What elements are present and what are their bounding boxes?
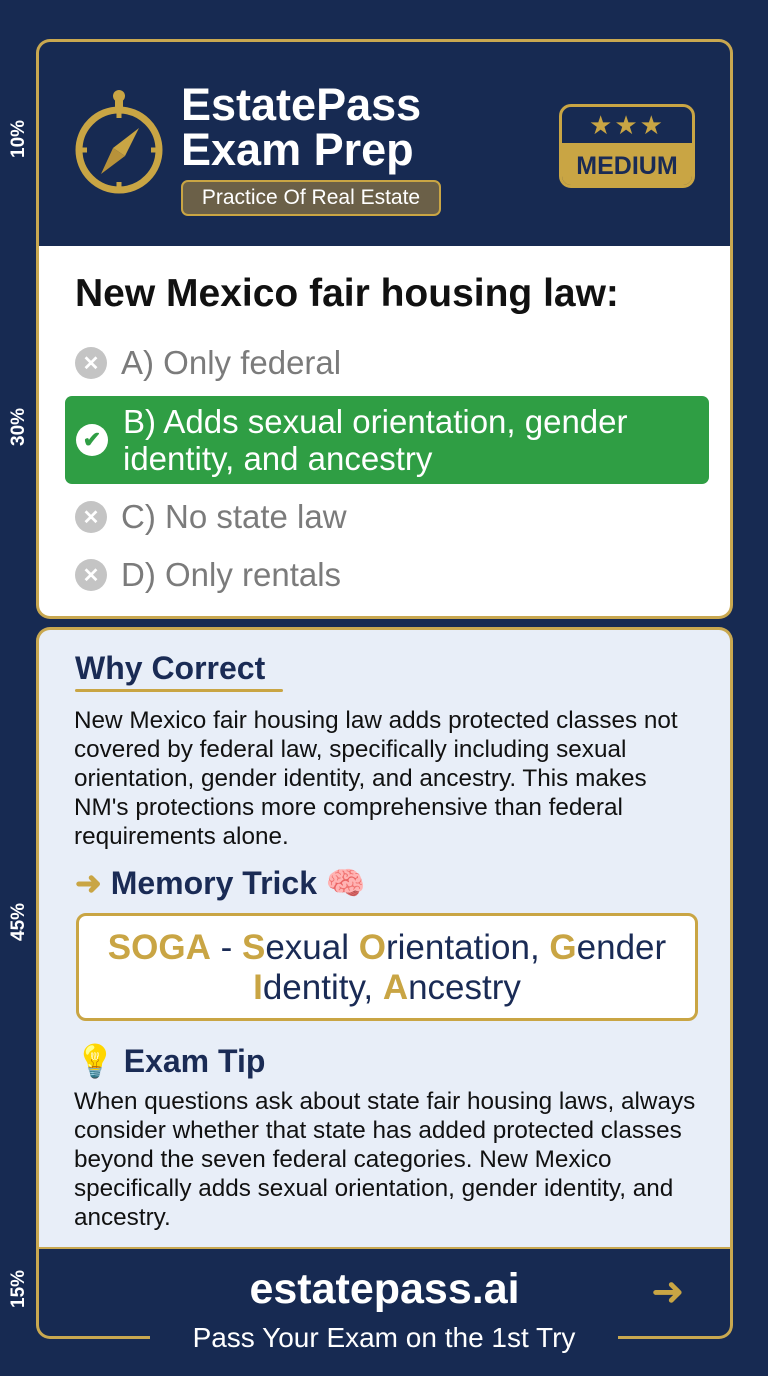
subtitle pill — [181, 180, 441, 216]
side label 10%: 10% — [8, 120, 29, 158]
option D: D) Only rentals — [121, 556, 341, 593]
arrow icon: ➜ — [651, 1270, 685, 1314]
title — [181, 79, 421, 175]
heading: memory trick: ➜ Memory Trick 🧠 — [75, 865, 366, 901]
header panel — [36, 39, 733, 249]
mnemonic box: SOGA - Sexual Orientation, Gender — [108, 928, 666, 967]
difficulty badge: ★★★ — [589, 110, 665, 140]
footer — [36, 1247, 733, 1339]
mnemonic box — [76, 913, 698, 1021]
tagline: Pass Your Exam on the 1st Try — [193, 1322, 575, 1353]
icon: compass — [76, 90, 162, 194]
tagline — [150, 1318, 618, 1358]
option C: C) No state law — [121, 498, 347, 535]
option A: A) Only federal — [121, 344, 341, 381]
option B correct: ✔ — [83, 427, 101, 452]
difficulty badge — [559, 104, 695, 188]
footer url: estatepass.ai — [249, 1265, 520, 1313]
question heading: New Mexico fair housing law: — [75, 272, 619, 315]
option B correct — [65, 396, 709, 484]
side label 45%: 45% — [8, 903, 29, 941]
option C: ✕ — [83, 506, 99, 528]
option B correct: B) Adds sexual orientation, gender — [123, 403, 628, 440]
option D: ✕ — [83, 564, 99, 586]
question panel — [36, 246, 733, 619]
heading: why correct: Why Correct — [75, 650, 265, 686]
title: EstatePass — [181, 79, 421, 130]
mnemonic box: Identity, Ancestry — [253, 968, 521, 1007]
text: exam tip: When questions ask about state fair housing laws, always consider whether that state has added protected classes beyond the seven federal categories. New Mexico specifically adds sexual orientation, gender identity, and ancestry. — [74, 1088, 695, 1231]
difficulty badge: MEDIUM — [576, 152, 678, 180]
option A: ✕ — [83, 352, 99, 374]
subtitle pill: Practice Of Real Estate — [202, 186, 420, 209]
explanation panel — [36, 627, 733, 1249]
side label 15%: 15% — [8, 1270, 29, 1308]
option B correct: identity, and ancestry — [123, 440, 432, 477]
text: explanation: New Mexico fair housing law adds protected classes not covered by federal law, specifically including sexual orientation, gender identity, and ancestry. This makes NM's protections more comprehensive than federal requirements alone. — [74, 707, 678, 850]
side label 30%: 30% — [8, 408, 29, 446]
heading: exam tip: 💡 Exam Tip — [75, 1043, 265, 1079]
title: Exam Prep — [181, 124, 414, 175]
